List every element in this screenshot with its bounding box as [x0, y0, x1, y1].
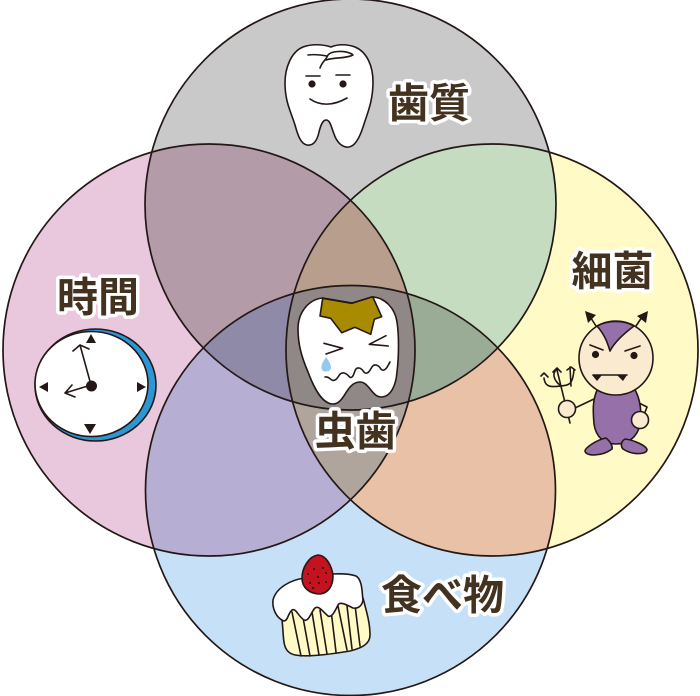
circle: time: [3, 144, 415, 556]
heading: time: 時間: [57, 274, 139, 320]
icon: tear drop: [321, 357, 331, 372]
overlap: quality and food left: [204, 294, 293, 400]
heading: cavity: 虫歯: [314, 408, 396, 454]
icon: smiling tooth: [285, 45, 373, 147]
heading: tooth quality: 歯質: [388, 80, 470, 126]
circle: tooth quality: [145, 0, 556, 410]
overlap: time and bacteria: [294, 402, 408, 498]
overlap: quality and time: [146, 144, 350, 346]
icon: strawberry cake: [273, 555, 370, 656]
heading: food: 食べ物: [381, 572, 504, 618]
heading: bacteria: 細菌: [572, 248, 654, 294]
overlap: quality and bacteria: [352, 144, 556, 346]
icon: crying decayed tooth: [298, 297, 398, 404]
overlap: quality and food right: [408, 294, 496, 400]
overlap: centre: [286, 286, 414, 409]
circle: bacteria: [286, 144, 698, 556]
icon: devil character: [541, 311, 653, 455]
circle: food: [146, 286, 556, 696]
icon: clock: [35, 329, 156, 441]
overlap: bacteria and food: [352, 349, 555, 556]
overlap: quality time bacteria: [296, 202, 406, 292]
overlap: time and food: [146, 349, 350, 556]
cavity: [320, 297, 382, 334]
